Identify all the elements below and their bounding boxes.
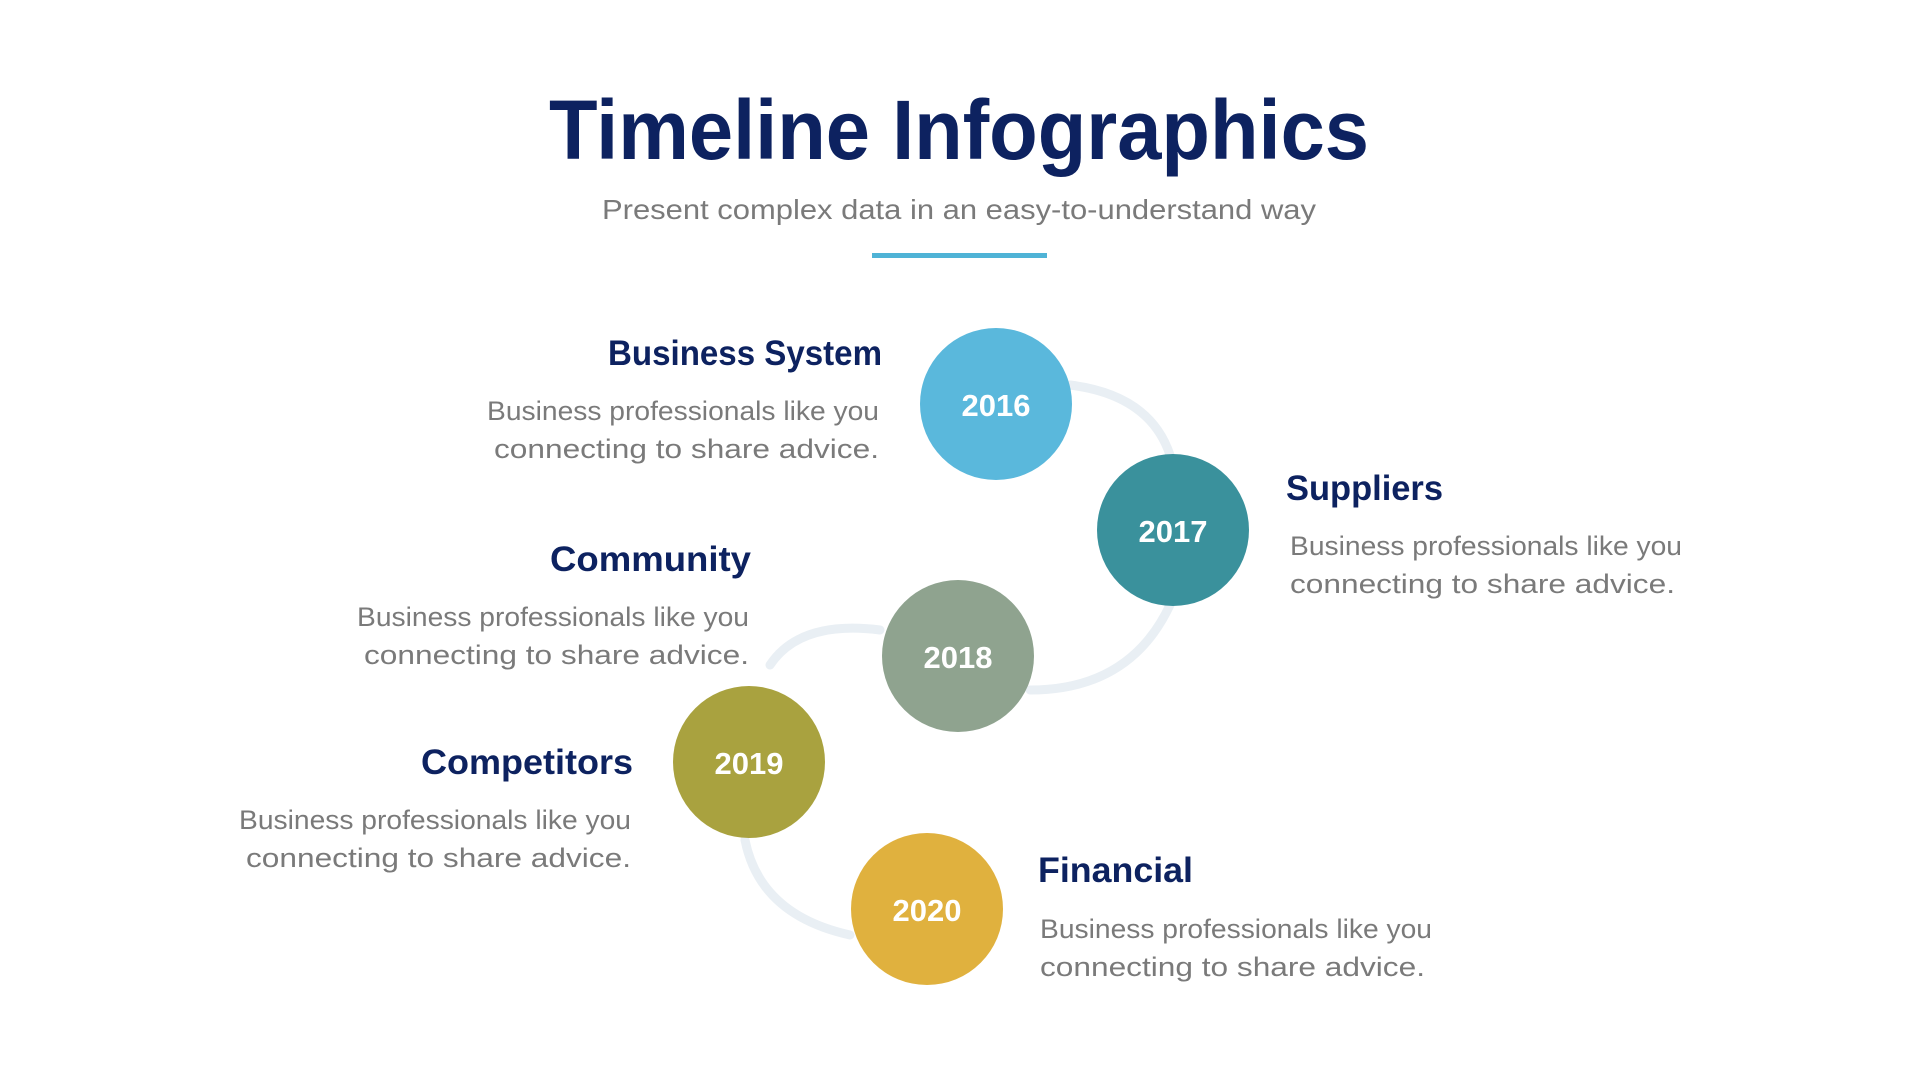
label: Suppliers: connecting to share advice. bbox=[1290, 569, 1675, 599]
circle 2019 bbox=[673, 686, 825, 838]
label: Business System: Business System bbox=[608, 334, 882, 373]
label: Financial bbox=[1038, 851, 1432, 982]
title: Timeline Infographics bbox=[549, 83, 1369, 177]
circle 2016 bbox=[920, 328, 1072, 480]
label: Suppliers: Business professionals like you bbox=[1290, 531, 1682, 561]
circle 2019: 2019 bbox=[715, 746, 783, 781]
circle 2020: 2020 bbox=[893, 893, 961, 928]
label: Competitors: Competitors bbox=[421, 743, 633, 782]
circle 2018: 2018 bbox=[924, 640, 992, 675]
label: Competitors: connecting to share advice. bbox=[246, 843, 631, 873]
connector arcs bbox=[745, 385, 1170, 935]
label: Business System: connecting to share advice. bbox=[494, 434, 879, 464]
label: Community bbox=[357, 540, 752, 670]
label: Financial: connecting to share advice. bbox=[1040, 952, 1425, 982]
label: Suppliers: Suppliers bbox=[1286, 469, 1443, 508]
label: Community: Community bbox=[550, 540, 752, 579]
label: Business System: Business professionals like you bbox=[487, 396, 879, 426]
circle 2018 bbox=[882, 580, 1034, 732]
subtitle: Present complex data in an easy-to-understand way bbox=[602, 194, 1316, 225]
circle 2017 bbox=[1097, 454, 1249, 606]
label: Competitors: Business professionals like you bbox=[239, 805, 631, 835]
label: Competitors bbox=[239, 743, 633, 873]
circle 2017: 2017 bbox=[1139, 514, 1207, 549]
circle 2020 bbox=[851, 833, 1003, 985]
label: Financial: Financial bbox=[1038, 851, 1193, 890]
circle 2016: 2016 bbox=[962, 388, 1030, 423]
label: Suppliers bbox=[1286, 469, 1682, 599]
label: Financial: Business professionals like you bbox=[1040, 914, 1432, 944]
underline accent bbox=[872, 253, 1047, 258]
label: Community: Business professionals like you bbox=[357, 602, 749, 632]
label: Community: connecting to share advice. bbox=[364, 640, 749, 670]
label: Business System bbox=[487, 334, 882, 464]
